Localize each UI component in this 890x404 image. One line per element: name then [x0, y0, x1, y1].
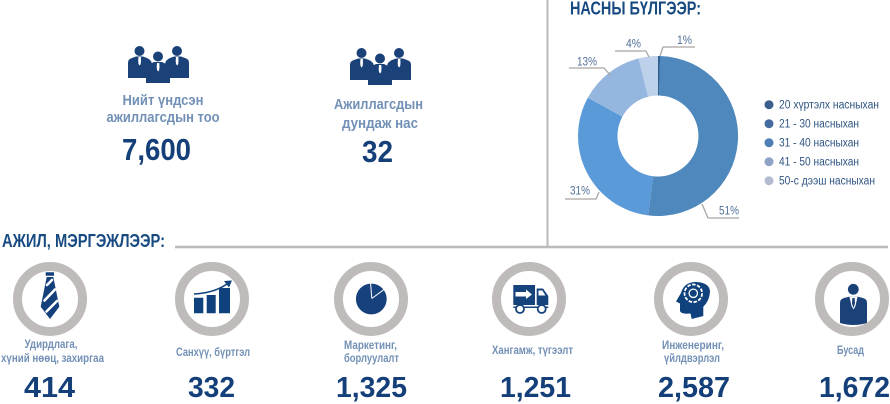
label: engineering: Инженеринг, [662, 340, 724, 352]
heading: by profession: АЖИЛ, МЭРГЭЖЛЭЭР: [2, 231, 165, 251]
number: marketing: 1,325 [336, 372, 407, 404]
number: engineering: 2,587 [658, 372, 730, 404]
panel: other [819, 266, 890, 404]
panel: logistics [492, 266, 573, 404]
label: management: Удирдлага, [24, 339, 78, 351]
icon: pie chart [338, 266, 404, 332]
label: management [1, 339, 105, 365]
label: marketing [344, 340, 399, 365]
segment: 31% [578, 98, 653, 215]
icon: group of people [128, 46, 189, 83]
donut chart: age distribution [578, 56, 738, 216]
callout: 4%: 4% [626, 38, 641, 50]
segment: 1% [658, 56, 660, 96]
panel: management [1, 266, 105, 404]
callout: 4% [615, 38, 649, 57]
heading: total employees [106, 92, 220, 126]
panel: engineering [658, 266, 730, 404]
heading: average age: Ажиллагсдын [334, 96, 423, 113]
number: finance: 332 [188, 372, 235, 404]
callout: 31%: 31% [570, 186, 590, 198]
heading: total employees: Нийт үндсэн [122, 92, 204, 109]
label: management: хүний нөөц, захиргаа [1, 353, 105, 365]
number: logistics: 1,251 [500, 372, 571, 404]
legend: age groups [764, 100, 879, 188]
callout: 13% [569, 56, 611, 76]
number: other: 1,672 [819, 372, 890, 404]
icon: necktie [18, 266, 82, 332]
callout: 1% [660, 35, 695, 56]
label: other: Бусад [837, 345, 865, 357]
heading: average age [334, 96, 423, 132]
icon: group of people [350, 48, 411, 85]
label: finance: Санхүү, бүртгэл [176, 347, 250, 359]
callout: 51%: 51% [719, 206, 739, 218]
icon: truck [496, 266, 562, 332]
heading: total employees: ажиллагсдын тоо [106, 109, 220, 126]
callout: 31% [565, 186, 599, 199]
callout: 51% [702, 204, 739, 218]
legend: age groups: 31 - 40 насныхан [779, 138, 859, 150]
segment: 4% [639, 56, 658, 97]
segment: 13% [588, 58, 648, 117]
panel: finance [176, 266, 250, 404]
label: marketing: Маркетинг, [344, 340, 397, 352]
icon: head with gear [658, 266, 724, 332]
legend: age groups: 20 хүртэлх насныхан [779, 100, 879, 112]
panel: marketing [336, 266, 407, 404]
callout: 13%: 13% [577, 56, 597, 68]
label: logistics: Хангамж, түгээлт [492, 345, 573, 357]
callout: 1%: 1% [677, 35, 692, 47]
number: management: 414 [24, 372, 75, 404]
panel: average age [334, 48, 423, 169]
icon: growth chart [180, 266, 244, 332]
segment: 51% [648, 56, 738, 216]
heading: average age: дундаж нас [342, 115, 418, 132]
label: engineering [662, 340, 724, 365]
number: average age: 32 [362, 134, 393, 169]
icon: person in suit [820, 266, 884, 332]
label: marketing: борлуулалт [344, 353, 399, 365]
number: total employees: 7,600 [122, 132, 191, 167]
label: engineering: үйлдвэрлэл [664, 353, 720, 365]
legend: age groups: 50-с дээш насныхан [779, 176, 875, 188]
legend: age groups: 21 - 30 насныхан [779, 118, 859, 130]
panel: total employees [106, 46, 220, 167]
legend: age groups: 41 - 50 насныхан [779, 156, 859, 168]
